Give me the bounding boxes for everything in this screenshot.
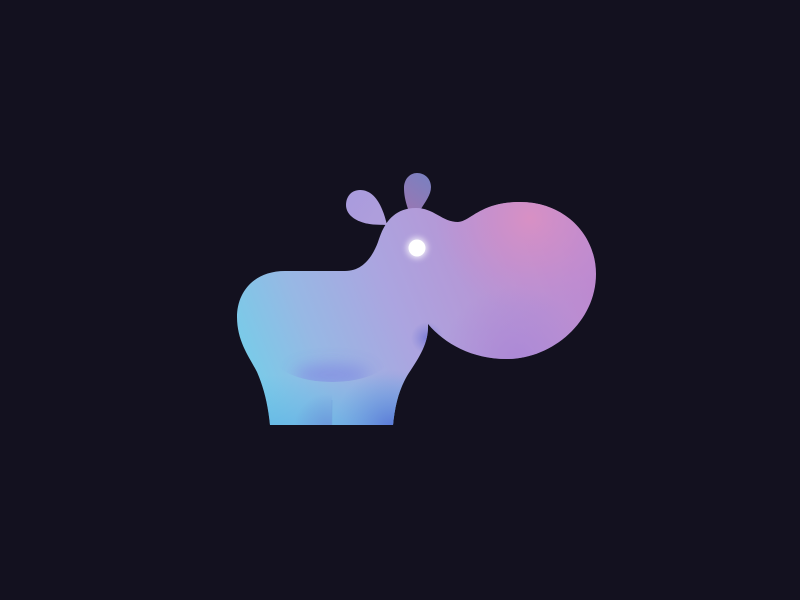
body gradient fill	[237, 202, 596, 425]
hippo body and head	[237, 202, 596, 425]
belly shadow	[294, 365, 370, 385]
icon: front ear	[346, 190, 387, 225]
left leg inner shade	[304, 403, 332, 425]
neck shadow	[414, 325, 440, 350]
leg divider	[332, 400, 333, 426]
icon: glowing eye	[406, 238, 428, 258]
snout lower shade	[461, 334, 564, 359]
right leg shade	[347, 379, 404, 425]
snout pink highlight	[452, 202, 596, 278]
icon: back ear	[404, 173, 431, 209]
illustration: gradient hippo on dark background	[237, 173, 596, 425]
legs tint	[264, 386, 400, 425]
